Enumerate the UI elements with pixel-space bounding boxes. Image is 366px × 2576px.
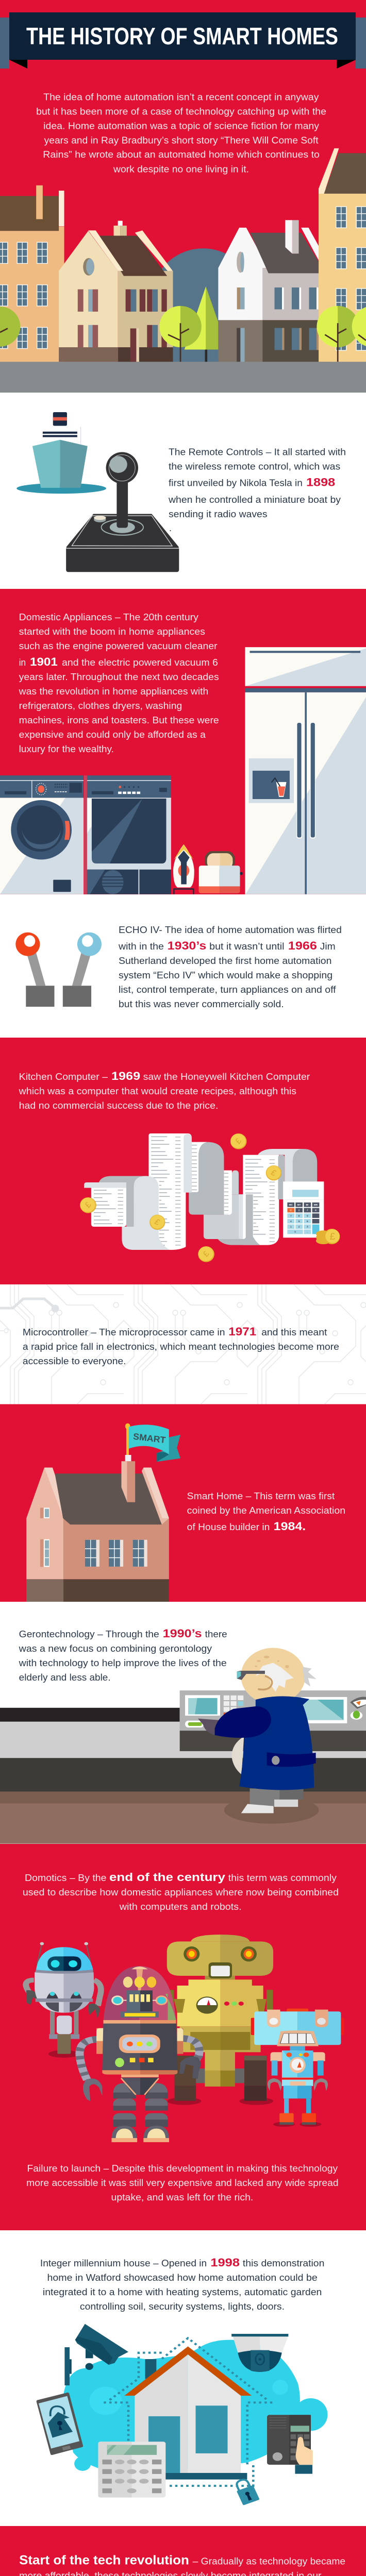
text: gerontechnology: elderly and less able. — [19, 1672, 111, 1683]
calculator: 6 — [307, 1220, 308, 1223]
text: domestic appliances: expensive and could only be afforded as a — [19, 730, 206, 740]
illustration: ship — [16, 412, 106, 494]
text: domotics — [23, 1871, 339, 1912]
title banner — [0, 12, 366, 69]
house — [124, 2346, 252, 2480]
text: start of the tech revolution: Start of the tech revolution — [19, 2553, 189, 2568]
cctv camera — [64, 2324, 156, 2385]
calculator: M- — [306, 1204, 309, 1207]
text: microcontroller: Microcontroller – The microprocessor came in — [23, 1327, 225, 1337]
panel: microcontroller — [0, 1284, 366, 1404]
panel: gerontechnology — [0, 1602, 366, 1844]
text: echo IV — [118, 925, 342, 1009]
text: kitchen computer: Kitchen Computer – — [19, 1072, 108, 1082]
text: gerontechnology: with technology to help improve the lives of the — [19, 1658, 227, 1668]
illustration: washing machine — [0, 775, 84, 894]
illustration: receipts, calculator and coins — [80, 1133, 340, 1262]
panel: domestic appliances — [0, 589, 366, 894]
flag: SMART — [132, 1432, 166, 1445]
text: echo IV: 1930’s — [168, 939, 206, 952]
calculator: / — [307, 1209, 308, 1212]
text: smart home: Smart Home – This term was first — [187, 1491, 335, 1501]
text: integer millennium house: this demonstration — [243, 2258, 324, 2268]
illustration: house with flag — [26, 1423, 180, 1602]
trees right — [317, 306, 366, 362]
intro text: years and in Ray Bradbury’s short story “There Will Come Soft — [44, 135, 319, 146]
intro text: work despite no one living in it. — [113, 164, 249, 174]
illustration: iron — [173, 844, 194, 894]
calculator: . — [307, 1231, 308, 1234]
text: microcontroller: a rapid price fall in electronics, which meant technologies become more — [23, 1342, 339, 1352]
text: domestic appliances — [19, 612, 219, 754]
text: domestic appliances: started with the boom in home appliances — [19, 626, 205, 637]
receipt: middle — [204, 1171, 246, 1239]
text: echo IV: list, control temperate, turn appliances on and off — [119, 985, 337, 995]
text: gerontechnology: was a new focus on combining gerontology — [19, 1643, 212, 1654]
text: domestic appliances: was the revolution in home appliances with — [19, 686, 208, 697]
text: domotics: used to describe how domestic appliances where now being combined — [23, 1887, 339, 1897]
coins: £ — [234, 1137, 243, 1146]
text: failure to launch — [26, 2163, 339, 2202]
text: integer millennium house: Integer millennium house – Opened in — [40, 2258, 207, 2268]
text: domestic appliances: and the electric powered vacuum 6 — [62, 657, 218, 668]
text: domestic appliances: Domestic Appliances – The 20th century — [19, 612, 198, 622]
flag — [129, 1425, 180, 1462]
text: gerontechnology: there — [205, 1629, 227, 1639]
illustration: joystick — [66, 452, 179, 572]
calculator: MC — [289, 1204, 293, 1207]
coins: £ — [202, 1249, 211, 1259]
padlock — [233, 2477, 260, 2505]
text: domestic appliances: luxury for the wealthy. — [19, 744, 114, 754]
text: microcontroller — [23, 1325, 339, 1366]
text: remote controls — [168, 447, 346, 533]
illustration: room and control console — [0, 1690, 366, 1844]
text: integer millennium house: integrated it to a home with heating systems, automatic garden — [43, 2287, 322, 2297]
text: remote controls: when he controlled a miniature boat by — [168, 495, 341, 505]
coins — [80, 1133, 340, 1262]
text: microcontroller: 1971 — [228, 1325, 256, 1338]
text: failure to launch: Failure to launch – Despite this development in making this technology — [27, 2163, 338, 2174]
text: failure to launch: more accessible it was still very expensive and lacked any wide spread — [26, 2178, 339, 2188]
text: remote controls: . — [169, 523, 172, 533]
text: echo IV: but it wasn’t until — [209, 941, 285, 952]
text: domestic appliances: 1901 — [30, 655, 58, 668]
text: start of the tech revolution: – Gradually as technology became — [193, 2556, 345, 2567]
tablet lock — [37, 2393, 83, 2455]
alarm keypad — [98, 2442, 165, 2498]
text: kitchen computer — [19, 1070, 310, 1111]
receipt: left — [84, 1176, 170, 1250]
text: domestic appliances: refrigerators, clothes dryers, washing — [19, 701, 182, 711]
text: echo IV: Jim — [320, 941, 336, 952]
calculator: 3 — [307, 1226, 308, 1229]
calculator: X — [315, 1209, 317, 1212]
coins: £ — [269, 1168, 278, 1178]
text: gerontechnology: Gerontechnology – Through the — [19, 1629, 159, 1639]
text: remote controls: the wireless remote control, which was — [169, 462, 340, 472]
text: echo IV: 1966 — [288, 939, 317, 952]
text: remote controls: sending it radio waves — [169, 509, 267, 519]
hill — [152, 248, 255, 362]
receipt: right — [218, 1149, 317, 1245]
intro text: The idea of home automation isn’t a recent concept in anyway — [43, 92, 319, 103]
panel: smart home — [0, 1404, 366, 1602]
panel: echo IV — [0, 894, 366, 1038]
calculator: 2 — [298, 1226, 300, 1229]
receipt: centre — [148, 1133, 224, 1250]
text: failure to launch: uptake, and was left for the rich. — [111, 2192, 253, 2202]
panel: remote controls — [0, 393, 366, 589]
ground band — [0, 362, 366, 393]
calculator: 4 — [290, 1220, 292, 1223]
text: smart home: of House builder in — [187, 1522, 270, 1532]
text: domestic appliances: in — [19, 657, 26, 668]
text: smart home — [187, 1491, 345, 1533]
tree: triangle — [185, 286, 218, 362]
illustration: security system house — [37, 2324, 328, 2505]
dotted security lines — [104, 2338, 272, 2486]
text: domestic appliances: years later. Throughout the next two decades — [19, 672, 219, 682]
intro text: but it has been more of a case of technology catching up with the — [36, 106, 326, 116]
intro text — [36, 92, 326, 174]
illustration: tumble dryer — [84, 775, 171, 894]
cloud — [63, 2340, 328, 2475]
panel: domotics — [0, 1844, 366, 2230]
text: echo IV: system “Echo IV” which would make a shopping — [119, 970, 332, 980]
text: domotics: Domotics – By the — [25, 1873, 106, 1883]
text: domestic appliances: such as the engine powered vacuum cleaner — [19, 641, 218, 651]
robot: yellow — [167, 1935, 273, 2105]
coins: £ — [330, 1231, 336, 1242]
panel: integer millennium house — [0, 2230, 366, 2526]
text: microcontroller: accessible to everyone. — [23, 1356, 126, 1366]
text: domotics: this term was commonly — [228, 1873, 337, 1883]
tree left — [0, 307, 20, 347]
illustration: robots — [26, 1935, 344, 2142]
calculator: 5 — [298, 1220, 300, 1223]
text: echo IV: but this was never commercially sold. — [119, 999, 284, 1009]
text: domotics: with computers and robots. — [119, 1902, 242, 1912]
text: integer millennium house: controlling soil, security systems, lights, doors. — [80, 2301, 285, 2312]
text: integer millennium house: home in Watford showcased how home automation could be — [47, 2273, 318, 2283]
calculator: MR — [314, 1204, 318, 1207]
house: yellow terrace — [319, 148, 366, 362]
calculator: ± — [298, 1209, 300, 1212]
text: kitchen computer: which was a computer that would create recipes, although this — [19, 1086, 296, 1096]
text: remote controls: 1898 — [306, 476, 335, 488]
dome camera — [231, 2334, 288, 2372]
illustration: elderly man — [198, 1648, 319, 1824]
text: echo IV: ECHO IV- The idea of home automation was flirted — [119, 925, 342, 935]
text: kitchen computer: had no commercial success due to the price. — [19, 1100, 218, 1111]
text: echo IV: Sutherland developed the first home automation — [119, 956, 331, 966]
calculator: M+ — [297, 1204, 301, 1207]
illustration: fridge — [245, 647, 366, 894]
calculator: 1 — [290, 1226, 292, 1229]
robot: grey with dome — [79, 1966, 201, 2142]
illustration: levers — [15, 933, 102, 1007]
house: white — [218, 220, 331, 362]
text: integer millennium house: 1998 — [210, 2256, 240, 2269]
text: remote controls: first unveiled by Nikola Tesla in — [169, 478, 303, 488]
intro text: Rains” he wrote about an automated home which continues to — [43, 149, 320, 160]
text: domestic appliances: machines, irons and toasters. But these were — [19, 715, 219, 725]
illustration: toaster — [199, 851, 243, 893]
coins: £ — [84, 1200, 93, 1210]
text: kitchen computer: 1969 — [111, 1070, 140, 1082]
panel: tech revolution, now and the future — [0, 2526, 366, 2576]
robot: blue — [251, 2009, 344, 2127]
robot: silver — [26, 1942, 101, 2058]
calculator: 0 — [294, 1231, 296, 1234]
tree round — [159, 306, 202, 362]
text: kitchen computer: saw the Honeywell Kitchen Computer — [143, 1072, 310, 1082]
calculator: C — [290, 1209, 292, 1212]
house: peach terrace — [0, 185, 64, 362]
text: domotics: end of the century — [109, 1871, 226, 1884]
coins: £ — [153, 1217, 161, 1227]
calculator — [283, 1181, 324, 1238]
calculator: 7 — [290, 1214, 292, 1217]
panel: kitchen computer — [0, 1038, 366, 1284]
text: smart home: coined by the American Association — [187, 1505, 345, 1516]
text: start of the tech revolution — [19, 2553, 346, 2576]
house: cream — [59, 221, 173, 362]
text: integer millennium house — [40, 2256, 324, 2312]
illustration: street of houses — [0, 148, 366, 362]
text: gerontechnology: 1990’s — [163, 1627, 202, 1640]
text: remote controls: The Remote Controls – It all started with — [169, 447, 346, 457]
panel: hero — [0, 0, 366, 393]
intro text: idea. Home automation was a topic of science fiction for many — [43, 121, 319, 131]
calculator: 9 — [307, 1214, 308, 1217]
text: smart home: 1984. — [274, 1520, 306, 1533]
calculator: 8 — [298, 1214, 300, 1217]
text: echo IV: with in the — [118, 941, 164, 952]
text: gerontechnology — [19, 1627, 227, 1683]
door entry panel with hand — [267, 2415, 313, 2474]
text: microcontroller: and this meant — [261, 1327, 327, 1337]
